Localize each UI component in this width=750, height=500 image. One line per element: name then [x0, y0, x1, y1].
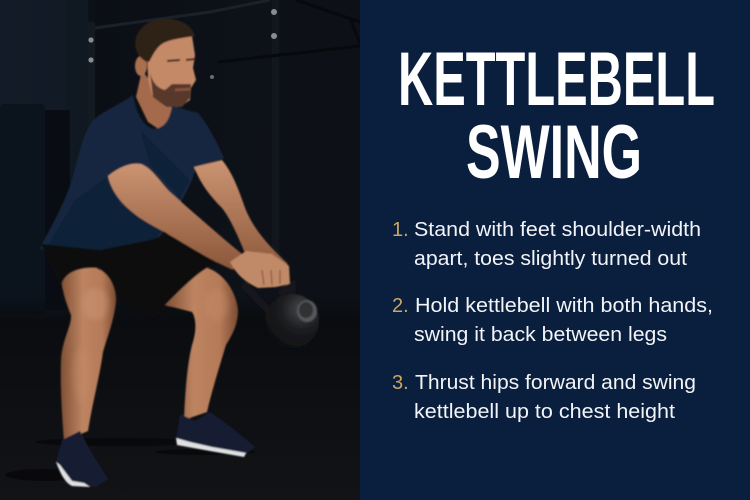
- mouth: [175, 89, 190, 90]
- eyes and brows: [167, 59, 195, 61]
- gym background wall: [0, 0, 360, 330]
- floor shadows: [5, 438, 255, 481]
- athlete figure: [40, 19, 319, 487]
- panel: instructions: [360, 0, 750, 500]
- left shoe: [56, 431, 108, 487]
- ear: [135, 56, 147, 76]
- step 3: kettlebell up to chest height: [414, 401, 675, 423]
- step 3: Thrust hips forward and swing: [415, 372, 696, 394]
- navy background: [360, 0, 750, 500]
- shorts: [41, 225, 238, 318]
- hair: [135, 19, 195, 62]
- left arm: [108, 164, 242, 270]
- panel: exercise photo illustration: [0, 0, 360, 500]
- stacked weight plates: [0, 104, 70, 314]
- step 2: Hold kettlebell with both hands,: [415, 295, 713, 317]
- hands: [230, 251, 290, 288]
- step 2: 2.: [392, 295, 409, 317]
- step 1: 1.: [392, 219, 409, 241]
- step 1: [392, 219, 701, 270]
- right shoe: [176, 412, 255, 457]
- step 2: swing it back between legs: [414, 324, 667, 346]
- step 2: [392, 295, 713, 346]
- left leg: [61, 268, 116, 441]
- t-shirt: [40, 95, 224, 262]
- face: [147, 36, 196, 107]
- step 3: 3.: [392, 372, 409, 394]
- neck: [136, 70, 178, 130]
- step 1: apart, toes slightly turned out: [414, 248, 687, 270]
- kettlebell: [245, 286, 319, 348]
- right leg: [165, 268, 238, 420]
- right arm: [194, 160, 288, 274]
- title: [398, 37, 715, 195]
- step 3: [392, 372, 696, 423]
- title: SWING: [466, 110, 642, 195]
- step 1: Stand with feet shoulder-width: [414, 219, 701, 241]
- beard: [150, 72, 191, 107]
- shirt shadow fold: [48, 130, 190, 250]
- gym floor: [0, 296, 360, 500]
